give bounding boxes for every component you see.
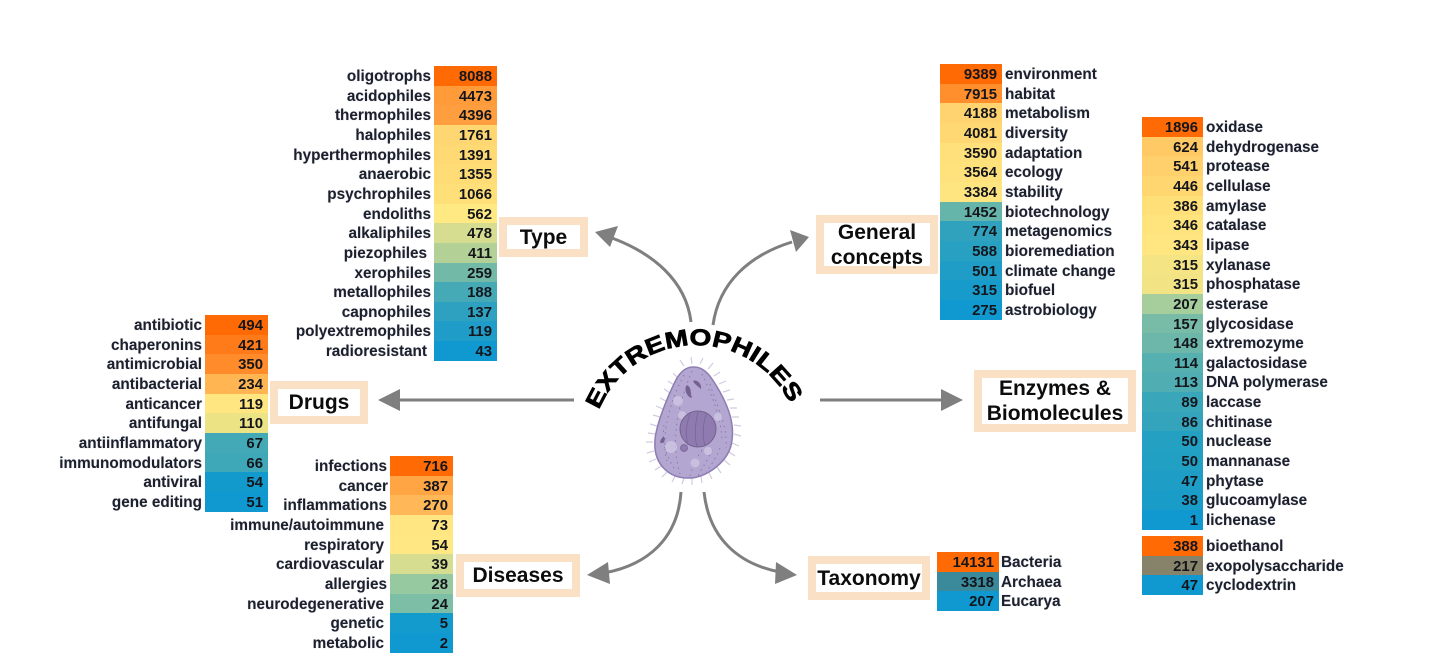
panel: General concepts table: biofuel bbox=[1005, 282, 1055, 299]
panel: Enzymes table: 346 bbox=[1173, 218, 1198, 234]
panel: Type table: 411 bbox=[468, 246, 492, 262]
panel: Enzymes table: laccase bbox=[1206, 394, 1261, 411]
panel: Enzymes table: lichenase bbox=[1206, 512, 1276, 529]
heading: Enzymes and Biomolecules: Biomolecules bbox=[987, 402, 1123, 425]
panel: General concepts table: bioremediation bbox=[1005, 243, 1115, 260]
panel: Drugs table: 67 bbox=[246, 436, 263, 452]
panel: Biomolecules table bbox=[1142, 536, 1344, 595]
panel: Diseases table: 716 bbox=[423, 459, 448, 475]
panel: Enzymes table: 541 bbox=[1173, 159, 1198, 175]
panel: Diseases table bbox=[230, 456, 453, 653]
panel: Diseases table: 73 bbox=[431, 518, 448, 534]
panel: Type table: halophiles bbox=[355, 127, 431, 144]
panel: General concepts table: 315 bbox=[972, 283, 997, 299]
panel: Enzymes table: DNA polymerase bbox=[1206, 374, 1328, 391]
arrow: to Taxonomy bbox=[704, 492, 797, 584]
panel: Enzymes table: 1896 bbox=[1165, 120, 1198, 136]
panel: Drugs table: 234 bbox=[238, 377, 263, 393]
panel: General concepts table: 1452 bbox=[964, 205, 997, 221]
panel: Diseases table: 5 bbox=[440, 616, 448, 632]
panel: Type table: anaerobic bbox=[359, 166, 431, 183]
panel: Diseases table: 24 bbox=[431, 597, 448, 613]
panel: Enzymes table bbox=[1142, 117, 1328, 530]
panel: Taxonomy table: Bacteria bbox=[1001, 554, 1061, 571]
panel: General concepts table: 7915 bbox=[964, 87, 997, 103]
panel: General concepts table: diversity bbox=[1005, 125, 1068, 142]
panel: Type table bbox=[293, 66, 497, 361]
panel: Diseases table: 270 bbox=[423, 498, 448, 514]
panel: Diseases table: 2 bbox=[440, 636, 448, 652]
panel: Type table: 1066 bbox=[459, 187, 492, 203]
panel: Enzymes table: 50 bbox=[1181, 454, 1198, 470]
stippled lines bbox=[663, 371, 726, 476]
panel: Diseases table: genetic bbox=[330, 615, 384, 632]
panel: Type table: 4473 bbox=[459, 89, 492, 105]
panel: Drugs table: immunomodulators bbox=[59, 455, 202, 472]
panel: Biomolecules table: bioethanol bbox=[1206, 538, 1283, 555]
arrow: to Drugs bbox=[378, 389, 574, 411]
heading: General concepts bbox=[816, 215, 938, 274]
panel: Type table: 1391 bbox=[459, 148, 492, 164]
panel: Type table: alkaliphiles bbox=[349, 225, 431, 242]
arrow: to Type bbox=[595, 226, 691, 322]
panel: Enzymes table: oxidase bbox=[1206, 119, 1263, 136]
arrow: to Diseases bbox=[587, 492, 681, 584]
panel: General concepts table: 774 bbox=[972, 224, 997, 240]
panel: General concepts table: environment bbox=[1005, 66, 1097, 83]
panel: Type table: psychrophiles bbox=[327, 186, 431, 203]
panel: Biomolecules table: cyclodextrin bbox=[1206, 577, 1296, 594]
panel: Diseases table: 39 bbox=[431, 557, 448, 573]
panel: Type table: 562 bbox=[467, 207, 492, 223]
panel: Drugs table: antibacterial bbox=[112, 376, 202, 393]
panel: Type table: xerophiles bbox=[354, 264, 431, 282]
panel: Enzymes table: 624 bbox=[1173, 140, 1198, 156]
panel: Diseases table: neurodegenerative bbox=[247, 596, 384, 613]
panel: Enzymes table: dehydrogenase bbox=[1206, 139, 1319, 156]
panel: Taxonomy table: 207 bbox=[969, 594, 994, 610]
panel: Enzymes table: phosphatase bbox=[1206, 276, 1300, 293]
panel: Diseases table: 28 bbox=[431, 577, 448, 593]
panel: Taxonomy table: 3318 bbox=[961, 575, 994, 591]
panel: General concepts table: habitat bbox=[1005, 86, 1055, 103]
heading: Type bbox=[499, 217, 588, 257]
panel: Diseases table: cancer bbox=[339, 478, 388, 495]
panel: Type table: 188 bbox=[467, 285, 492, 301]
heading: Drugs bbox=[270, 381, 368, 424]
panel: Biomolecules table: 388 bbox=[1173, 539, 1198, 555]
panel: Biomolecules table: exopolysaccharide bbox=[1206, 558, 1344, 575]
panel: General concepts table: 9389 bbox=[964, 67, 997, 83]
heading: General concepts: concepts bbox=[831, 246, 923, 268]
panel: Diseases table: respiratory bbox=[304, 537, 384, 554]
pale vacuoles bbox=[665, 396, 722, 468]
panel: Enzymes table: 114 bbox=[1174, 356, 1198, 372]
panel: Enzymes table: phytase bbox=[1206, 473, 1264, 490]
panel: Drugs table: 110 bbox=[239, 416, 263, 432]
panel: Enzymes table: 343 bbox=[1173, 238, 1198, 254]
panel: Enzymes table: lipase bbox=[1206, 237, 1249, 254]
panel: Enzymes table: catalase bbox=[1206, 217, 1266, 234]
panel: Enzymes table: xylanase bbox=[1206, 257, 1271, 274]
panel: Enzymes table: mannanase bbox=[1206, 453, 1290, 470]
panel: General concepts table: 275 bbox=[972, 303, 997, 319]
panel: Drugs table: 51 bbox=[246, 495, 263, 511]
panel: General concepts table: climate change bbox=[1005, 262, 1116, 280]
panel: Taxonomy table bbox=[937, 552, 1062, 611]
panel: Type table: thermophiles bbox=[335, 107, 431, 124]
panel: General concepts table: 3590 bbox=[964, 146, 997, 162]
panel: Drugs table: 350 bbox=[238, 357, 263, 373]
panel: Drugs table bbox=[59, 315, 268, 512]
heading: Drugs: Drugs bbox=[289, 391, 349, 414]
panel: Enzymes table: 315 bbox=[1173, 258, 1198, 274]
panel: Type table: acidophiles bbox=[347, 88, 431, 105]
heading: General concepts: General bbox=[838, 220, 916, 244]
panel: Drugs table: 66 bbox=[246, 456, 263, 472]
panel: Enzymes table: 315 bbox=[1173, 277, 1198, 293]
panel: General concepts table: adaptation bbox=[1005, 145, 1082, 162]
panel: Type table: capnophiles bbox=[342, 304, 431, 321]
panel: Diseases table: immune/autoimmune bbox=[230, 517, 384, 534]
panel: Enzymes table: 148 bbox=[1173, 336, 1198, 352]
panel: Enzymes table: glycosidase bbox=[1206, 316, 1294, 332]
panel: Enzymes table: amylase bbox=[1206, 198, 1266, 215]
panel: Type table: polyextremophiles bbox=[296, 323, 431, 340]
panel: Enzymes table: extremozyme bbox=[1206, 335, 1304, 352]
heading: Enzymes and Biomolecules: Enzymes & bbox=[999, 377, 1111, 400]
panel: General concepts table: metagenomics bbox=[1005, 223, 1112, 240]
panel: Enzymes table: cellulase bbox=[1206, 178, 1271, 195]
heading: Enzymes and Biomolecules bbox=[974, 370, 1136, 432]
panel: Enzymes table: 38 bbox=[1181, 493, 1198, 509]
panel: Enzymes table: 113 bbox=[1174, 375, 1198, 391]
panel: Enzymes table: esterase bbox=[1206, 296, 1268, 313]
panel: Enzymes table: 47 bbox=[1181, 474, 1198, 490]
panel: Type table: 8088 bbox=[459, 69, 492, 85]
cell body bbox=[655, 367, 732, 478]
panel: Drugs table: chaperonins bbox=[111, 337, 202, 354]
panel: Enzymes table: protease bbox=[1206, 158, 1270, 175]
panel: Type table: 119 bbox=[468, 324, 492, 340]
heading: Diseases: Diseases bbox=[472, 564, 564, 587]
panel: Enzymes table: 386 bbox=[1173, 199, 1198, 215]
panel: General concepts table: 4081 bbox=[964, 126, 997, 142]
panel: Enzymes table: 446 bbox=[1173, 179, 1198, 195]
panel: Type table: 137 bbox=[467, 305, 492, 321]
panel: Drugs table: 421 bbox=[238, 338, 263, 354]
panel: Diseases table: 54 bbox=[431, 538, 448, 554]
panel: Enzymes table: nuclease bbox=[1206, 433, 1271, 450]
panel: Diseases table: infections bbox=[315, 458, 387, 475]
panel: Drugs table: antimicrobial bbox=[107, 356, 202, 373]
panel: General concepts table: metabolism bbox=[1005, 105, 1090, 122]
panel: Enzymes table: 1 bbox=[1190, 513, 1198, 529]
panel: General concepts table: astrobiology bbox=[1005, 302, 1097, 319]
panel: Type table: piezophiles bbox=[344, 245, 427, 262]
panel: Enzymes table: 89 bbox=[1181, 395, 1198, 411]
panel: Biomolecules table: 217 bbox=[1173, 559, 1198, 575]
panel: Enzymes table: 207 bbox=[1173, 297, 1198, 313]
panel: General concepts table: 588 bbox=[972, 244, 997, 260]
title: EXTREMOPHILES on an arc: EXTREMOPHILES bbox=[585, 328, 802, 409]
panel: Taxonomy table: 14131 bbox=[953, 555, 994, 571]
heading: Diseases bbox=[456, 554, 580, 597]
panel: General concepts table bbox=[940, 64, 1116, 320]
panel: Type table: radioresistant bbox=[326, 343, 427, 360]
panel: Diseases table: 387 bbox=[423, 479, 448, 495]
panel: Biomolecules table: 47 bbox=[1181, 578, 1198, 594]
arrow: to Enzymes and Biomolecules bbox=[820, 389, 963, 411]
panel: Diseases table: inflammations bbox=[283, 497, 387, 514]
panel: Enzymes table: galactosidase bbox=[1206, 355, 1307, 372]
panel: Enzymes table: 157 bbox=[1173, 316, 1198, 332]
panel: Type table: 43 bbox=[475, 344, 492, 360]
panel: Type table: endoliths bbox=[363, 206, 431, 223]
arrow: to General concepts bbox=[713, 230, 809, 325]
panel: Drugs table: antiviral bbox=[143, 474, 202, 491]
panel: Enzymes table: 50 bbox=[1181, 434, 1198, 450]
panel: General concepts table: 4188 bbox=[964, 106, 997, 122]
panel: Drugs table: 119 bbox=[239, 397, 263, 413]
panel: Type table: 478 bbox=[467, 226, 492, 242]
heading: Taxonomy: Taxonomy bbox=[817, 566, 921, 590]
panel: Diseases table: metabolic bbox=[313, 635, 384, 652]
panel: Drugs table: gene editing bbox=[112, 494, 202, 511]
cilia bbox=[646, 357, 741, 485]
heading: Type: Type bbox=[520, 226, 567, 248]
panel: Type table: 4396 bbox=[459, 108, 492, 124]
panel: General concepts table: stability bbox=[1005, 184, 1063, 201]
heading: Taxonomy bbox=[808, 556, 930, 600]
panel: Diseases table: cardiovascular bbox=[276, 556, 384, 573]
panel: Type table: 259 bbox=[467, 266, 492, 282]
panel: Drugs table: antifungal bbox=[129, 415, 202, 432]
panel: Type table: oligotrophs bbox=[347, 68, 431, 85]
panel: General concepts table: 3564 bbox=[964, 165, 997, 181]
panel: General concepts table: ecology bbox=[1005, 164, 1063, 181]
panel: Drugs table: antiinflammatory bbox=[79, 435, 202, 452]
panel: Type table: metallophiles bbox=[333, 284, 431, 301]
panel: Drugs table: 494 bbox=[238, 318, 263, 334]
panel: Drugs table: antibiotic bbox=[134, 317, 202, 334]
panel: Type table: 1355 bbox=[459, 167, 492, 183]
panel: General concepts table: 501 bbox=[972, 264, 997, 280]
organelles bbox=[660, 381, 701, 443]
panel: Drugs table: 54 bbox=[246, 475, 263, 491]
panel: Taxonomy table: Eucarya bbox=[1001, 593, 1061, 610]
panel: Enzymes table: glucoamylase bbox=[1206, 492, 1307, 509]
panel: Drugs table: anticancer bbox=[125, 396, 202, 413]
panel: Diseases table: allergies bbox=[325, 576, 387, 593]
panel: Enzymes table: 86 bbox=[1181, 415, 1198, 431]
panel: General concepts table: biotechnology bbox=[1005, 204, 1110, 221]
nucleus bbox=[680, 411, 716, 447]
panel: General concepts table: 3384 bbox=[964, 185, 997, 201]
panel: Type table: 1761 bbox=[459, 128, 492, 144]
icon: extremophile cell bbox=[646, 357, 741, 485]
panel: Taxonomy table: Archaea bbox=[1001, 574, 1061, 591]
panel: Enzymes table: chitinase bbox=[1206, 414, 1272, 431]
panel: Type table: hyperthermophiles bbox=[293, 147, 431, 164]
